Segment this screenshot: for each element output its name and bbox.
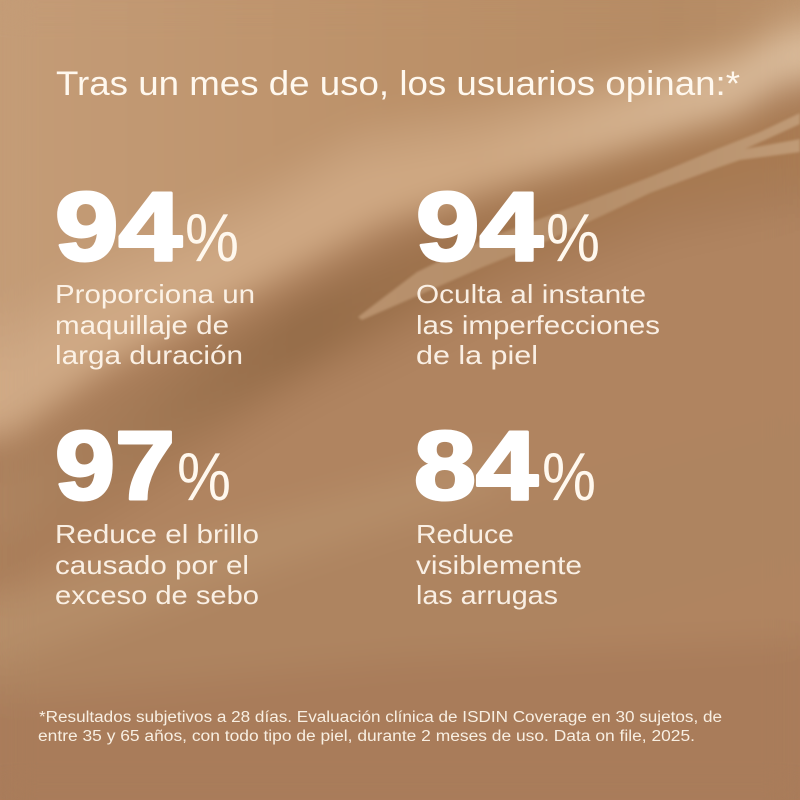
description: reduces wrinkles: las arrugas	[416, 580, 558, 610]
stat: 94% larga duración	[55, 172, 255, 370]
footnote	[38, 709, 722, 745]
description: hides imperfections	[416, 279, 660, 370]
value: 97%: %	[177, 439, 231, 515]
stat: 97% brillo	[55, 411, 259, 610]
value: 94%: %	[185, 200, 239, 276]
value: 94%: %	[546, 200, 600, 276]
description: reduces shine: Reduce el brillo	[55, 519, 259, 549]
footnote: *Resultados subjetivos a 28 días. Evaluación clínica de ISDIN Coverage en 30 sujetos, de	[39, 709, 722, 726]
description: reduces shine: causado por el	[55, 550, 249, 580]
description: long-lasting makeup: maquillaje de	[55, 310, 229, 340]
value: 94%: 94	[416, 172, 543, 281]
description: reduces wrinkles	[416, 519, 582, 610]
description: hides imperfections: las imperfecciones	[416, 310, 660, 340]
title: Tras un mes de uso, los usuarios opinan:*	[56, 65, 740, 103]
description: hides imperfections: Oculta al instante	[416, 279, 646, 309]
description: reduces wrinkles: visiblemente	[416, 550, 582, 580]
value: 97%: 97	[55, 411, 175, 520]
footnote: entre 35 y 65 años, con todo tipo de piel, durante 2 meses de uso. Data on file, 2025.	[38, 728, 695, 745]
stat: 94% imperfecciones	[416, 172, 660, 370]
description: reduces shine: exceso de sebo	[55, 580, 259, 610]
description: long-lasting makeup	[55, 279, 255, 370]
value: 94%	[55, 172, 239, 281]
value: 94%: 94	[55, 172, 182, 281]
description: long-lasting makeup: larga duración	[55, 340, 243, 370]
value: 94%	[416, 172, 600, 281]
description: hides imperfections: de la piel	[416, 340, 538, 370]
value: 84%: 84	[414, 411, 538, 520]
stat: 84% arrugas	[414, 411, 596, 610]
value: 84%: %	[542, 439, 596, 515]
description: reduces shine	[55, 519, 259, 610]
description: reduces wrinkles: Reduce	[416, 519, 514, 549]
value: 97%	[55, 411, 231, 520]
value: 84%	[414, 411, 596, 520]
description: long-lasting makeup: Proporciona un	[55, 279, 255, 309]
streak of foundation	[358, 113, 800, 320]
